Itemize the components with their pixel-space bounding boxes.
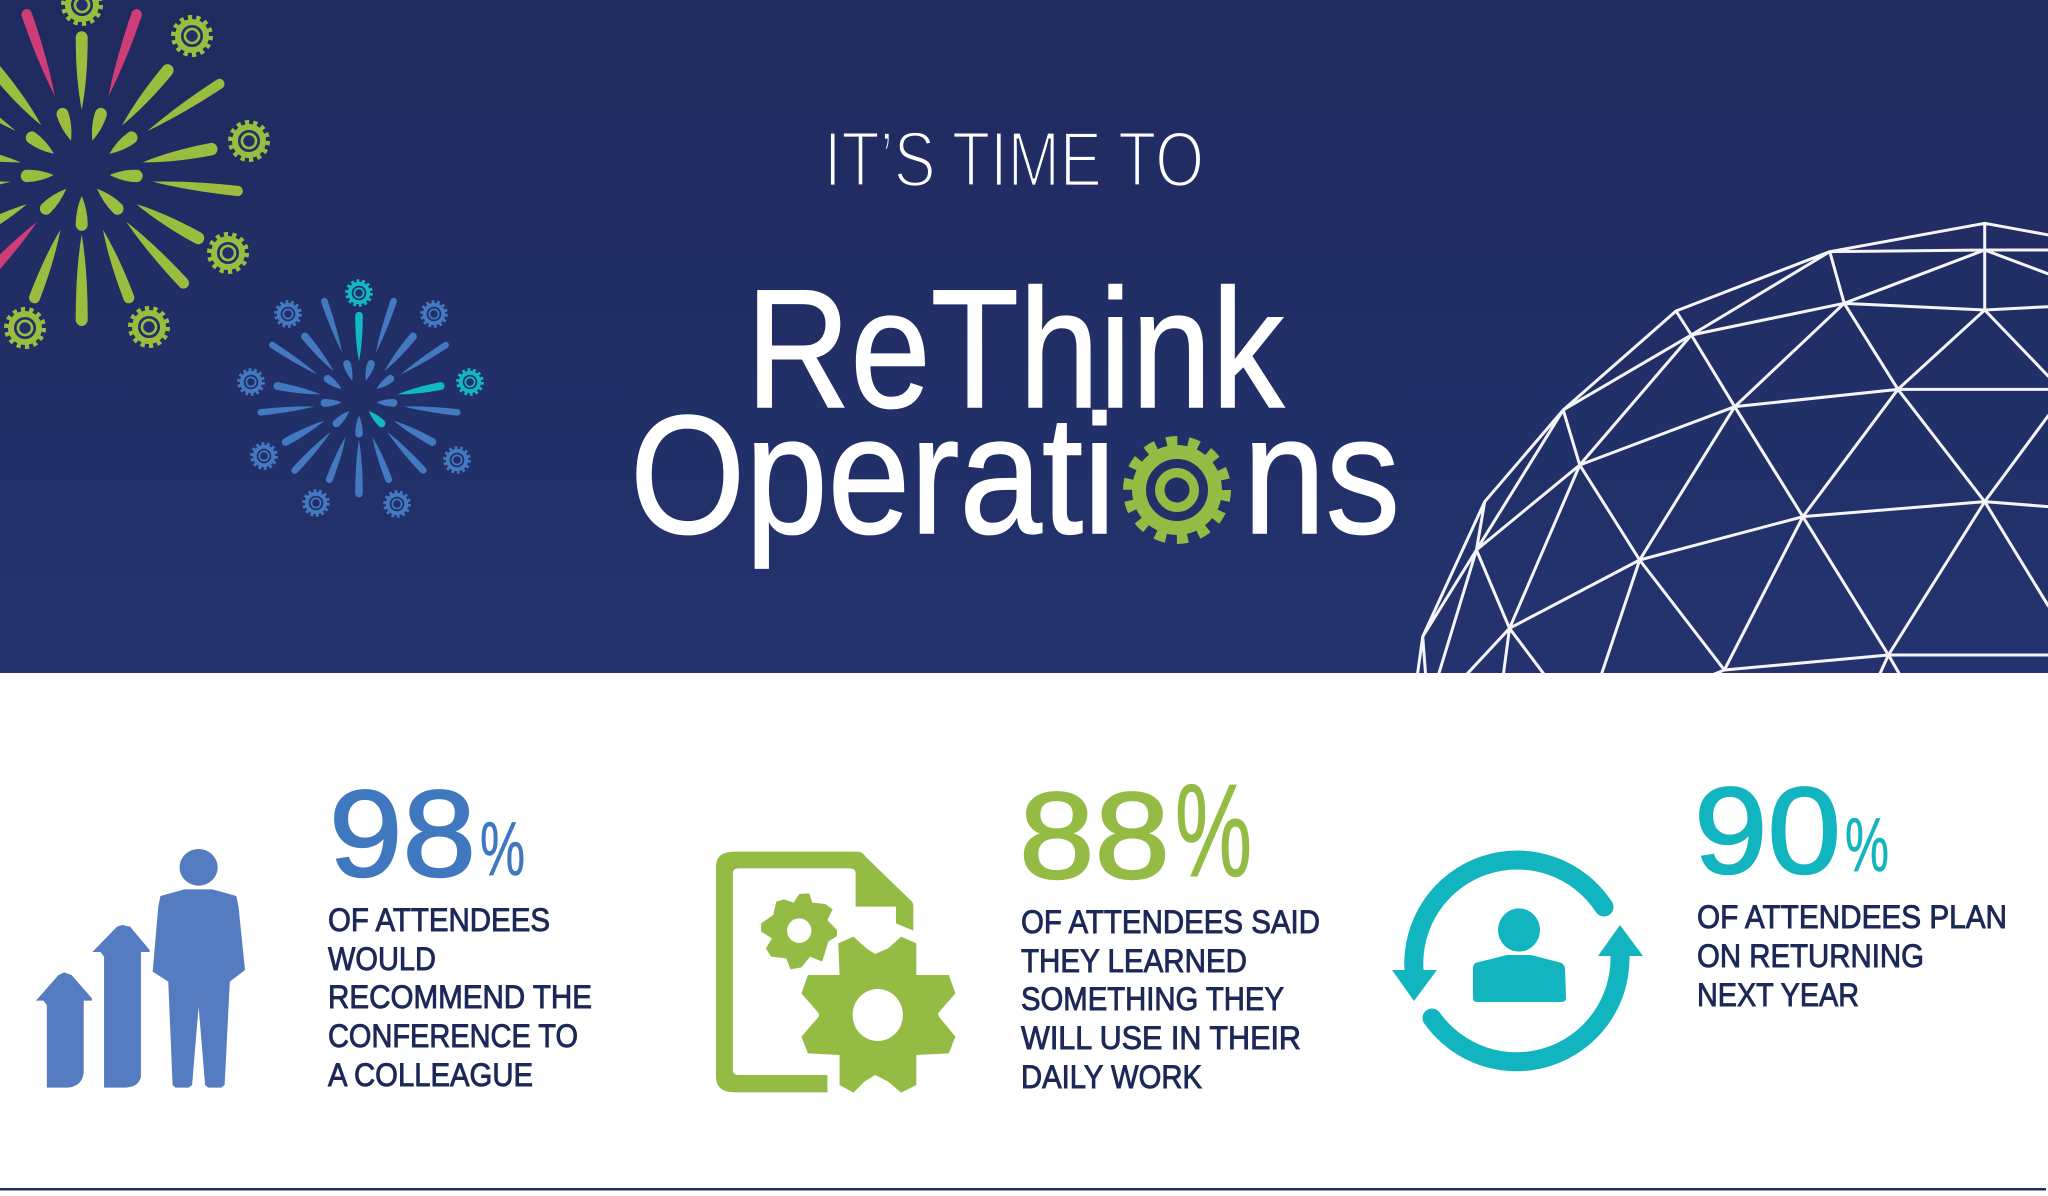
stat: 98 percent [329,766,525,903]
text: would recommend: RECOMMEND THE [328,979,592,1015]
blue and teal firework [239,281,482,516]
large gear [801,937,955,1093]
text: would recommend: WOULD [328,941,436,977]
small gear [761,893,837,969]
text: plan on returning: ON RETURNING [1697,938,1924,974]
text: would recommend: A COLLEAGUE [328,1057,533,1093]
text: learned something: DAILY WORK [1021,1059,1202,1095]
stat: 88 percent [1019,757,1252,905]
title: Operations: Operati [630,380,1116,569]
icon: returning person cycle [1392,860,1643,1062]
firework petals: green and pink [0,8,243,326]
text: plan on returning: OF ATTENDEES PLAN [1697,899,2007,935]
stat: 90 percent: % [1845,803,1889,888]
title: Operations: ns [1243,380,1400,569]
text: would recommend: OF ATTENDEES [328,902,550,938]
stat: 88 percent: 88 [1019,768,1170,905]
stat: 98 percent: 98 [329,766,476,903]
green and pink firework [0,0,267,346]
firework gears: green [6,0,268,346]
icon: title gear [1129,442,1225,538]
text: learned something [1021,904,1320,1095]
text: would recommend [328,902,592,1093]
text: plan on returning [1697,899,2007,1013]
heading: It's time to: IT’S TIME TO [824,115,1204,203]
firework gears: blue and teal [239,281,482,516]
firework petals: blue and teal [257,297,461,497]
text: would recommend: CONFERENCE TO [328,1018,578,1054]
icon: arrows and person [36,849,245,1088]
text: learned something: WILL USE IN THEIR [1021,1020,1301,1056]
text: learned something: THEY LEARNED [1021,943,1247,979]
stat: 88 percent: % [1175,757,1252,904]
title: Operations: o [1125,380,1231,569]
text: learned something: OF ATTENDEES SAID [1021,904,1320,940]
geodesic dome [1417,223,2048,675]
bottom rule [0,1188,2046,1190]
banner background [0,0,2048,673]
title: ReThink: ReThink [746,254,1284,443]
icon: document with gears [716,852,955,1093]
text: plan on returning: NEXT YEAR [1697,977,1859,1013]
text: learned something: SOMETHING THEY [1021,981,1284,1017]
stat: 90 percent: 90 [1694,763,1841,900]
stat: 98 percent: % [480,807,525,892]
